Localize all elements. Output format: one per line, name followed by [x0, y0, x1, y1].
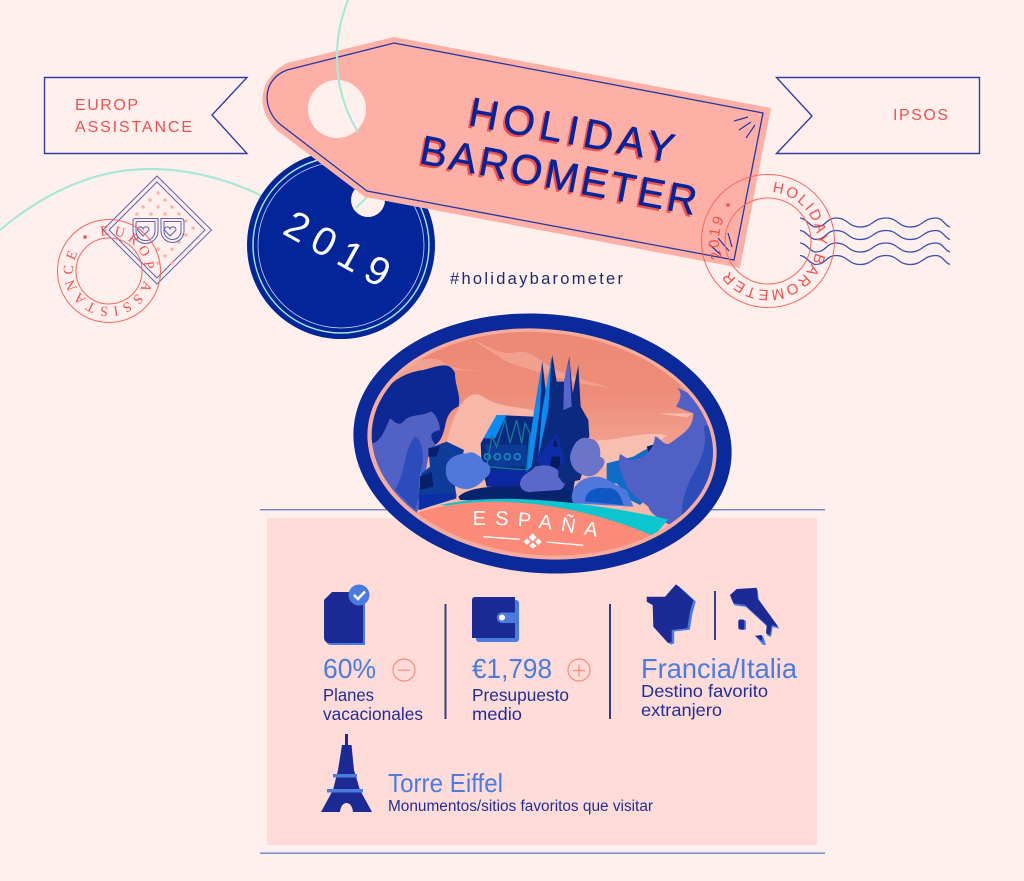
- stamp: Holiday Barometer postmark: HOLIDAY BAROMETER: [723, 182, 828, 300]
- stat: Francia/Italia destino favorito: Francia/Italia: [641, 653, 797, 684]
- round tag: 2019: [247, 151, 435, 339]
- shrubs: [458, 486, 580, 503]
- stat: 60% planes vacacionales: 60%: [323, 653, 376, 684]
- icon: France map: [647, 584, 696, 645]
- España label: ESPAÑA: [474, 511, 596, 537]
- stat: 60% planes vacacionales: [323, 653, 423, 724]
- right tree: [619, 388, 713, 524]
- title: HOLIDAY: [465, 89, 678, 172]
- left ribbon: Europ Assistance: ASSISTANCE: [75, 119, 192, 136]
- top rule: [260, 509, 825, 510]
- left tree, light: [370, 412, 440, 513]
- luggage tag: Holiday Barometer: [262, 0, 771, 268]
- stat: Francia/Italia destino favorito: Destino favorito: [641, 681, 768, 701]
- waves: [800, 218, 950, 264]
- right buildings: [606, 448, 649, 505]
- stat: Francia/Italia destino favorito: extranjero: [641, 700, 722, 720]
- buildings left: [418, 442, 464, 510]
- title shadow: HOLIDAY: [463, 91, 676, 174]
- stamp: Holiday Barometer postmark: 2019: [708, 216, 723, 260]
- left tree, dark: [370, 365, 459, 450]
- divider: [714, 591, 716, 640]
- stat: 60% planes vacacionales: Planes: [323, 685, 374, 705]
- icon: document with check: [324, 584, 370, 645]
- icon: wallet: [472, 597, 519, 642]
- teal ground: [440, 499, 668, 537]
- panel: statistics background: [267, 518, 817, 845]
- hashtag: #holidaybarometer: [450, 270, 624, 288]
- right ribbon: Ipsos: IPSOS: [893, 107, 948, 124]
- stat: €1,798 presupuesto medio: [472, 653, 590, 724]
- tag corner rays: [710, 117, 755, 255]
- illustration: Sagrada Familia: [372, 332, 713, 556]
- round tag: 2019: 2019: [277, 202, 398, 296]
- church: [481, 355, 589, 490]
- divider: [444, 604, 446, 719]
- stamp: Europ Assistance postmark: EUROP ASSISTANCE: [64, 226, 154, 316]
- divider: [609, 604, 611, 719]
- icon: Eiffel tower: [321, 734, 372, 812]
- stat: 60% planes vacacionales: vacacionales: [323, 704, 423, 724]
- stat: €1,798 presupuesto medio: medio: [472, 704, 522, 724]
- salmon ribbon: [417, 502, 651, 556]
- stat: Torre Eiffel: [388, 768, 653, 815]
- stamp: diamond with glasses: [103, 176, 212, 284]
- left ribbon: Europ Assistance: [44, 78, 247, 154]
- stat: €1,798 presupuesto medio: €1,798: [472, 653, 552, 684]
- inner ring overlay: [360, 316, 724, 572]
- left ribbon: Europ Assistance: EUROP: [75, 97, 138, 114]
- stat: €1,798 presupuesto medio: Presupuesto: [472, 685, 569, 705]
- stat: Torre Eiffel: Torre Eiffel: [388, 768, 503, 798]
- icon: Italy map: [730, 588, 779, 645]
- oval badge: España: [353, 314, 732, 574]
- bottom rule: [260, 852, 825, 854]
- title shadow: BAROMETER: [414, 129, 699, 226]
- mint arc left: [0, 169, 262, 230]
- title: BAROMETER: [416, 127, 701, 224]
- right ribbon: Ipsos: [776, 78, 980, 154]
- stat: Torre Eiffel: Monumentos/sitios favoritos que visitar: [388, 798, 653, 815]
- stat: Francia/Italia destino favorito: [641, 653, 797, 720]
